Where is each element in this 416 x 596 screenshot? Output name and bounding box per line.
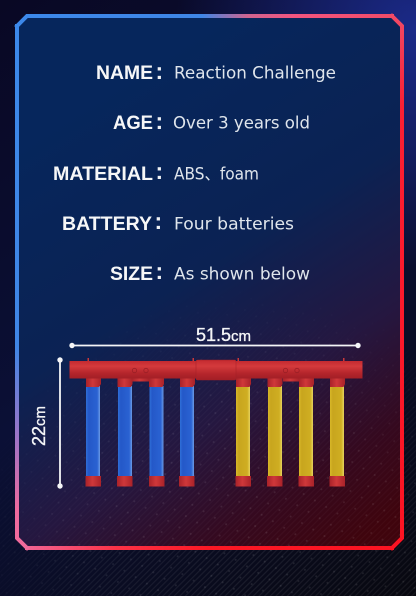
small clips [132, 368, 299, 373]
red joints and end caps [86, 376, 345, 486]
toy: reaction challenge bar [70, 358, 362, 486]
yellow tubes [236, 386, 344, 477]
spec row: name: NAME [96, 63, 153, 84]
spec row: name [96, 58, 336, 84]
spec row: material [53, 158, 259, 185]
spec row: age: Over 3 years old [173, 114, 310, 132]
spec row: age: AGE [113, 113, 153, 134]
height dimension: 22cm [29, 357, 63, 489]
spec row: name: Reaction Challenge [174, 64, 336, 82]
spec row: material: ABS、foam [174, 164, 259, 184]
height dimension: 22cm: 22cm [29, 406, 49, 446]
spec row: battery [62, 208, 294, 235]
width dimension: 51.5cm: 51.5cm [196, 325, 251, 345]
spec row: size [110, 258, 310, 285]
spec row: material: MATERIAL [53, 164, 153, 185]
center sleeve [196, 360, 236, 380]
spec row: battery: : [154, 208, 162, 234]
spec row: material: : [156, 158, 163, 184]
spec row: age: : [156, 108, 163, 134]
blue tubes [86, 386, 194, 477]
main red bar [70, 361, 362, 378]
spec row: size: : [156, 258, 163, 284]
spec row: age [113, 108, 310, 134]
spec row: battery: Four batteries [174, 214, 294, 234]
spec row: battery: BATTERY [62, 214, 152, 235]
pins [88, 358, 344, 361]
spec row: size: As shown below [174, 264, 310, 284]
width dimension: 51.5cm [69, 325, 361, 348]
spec row: size: SIZE [110, 264, 153, 285]
spec row: name: : [156, 58, 163, 84]
